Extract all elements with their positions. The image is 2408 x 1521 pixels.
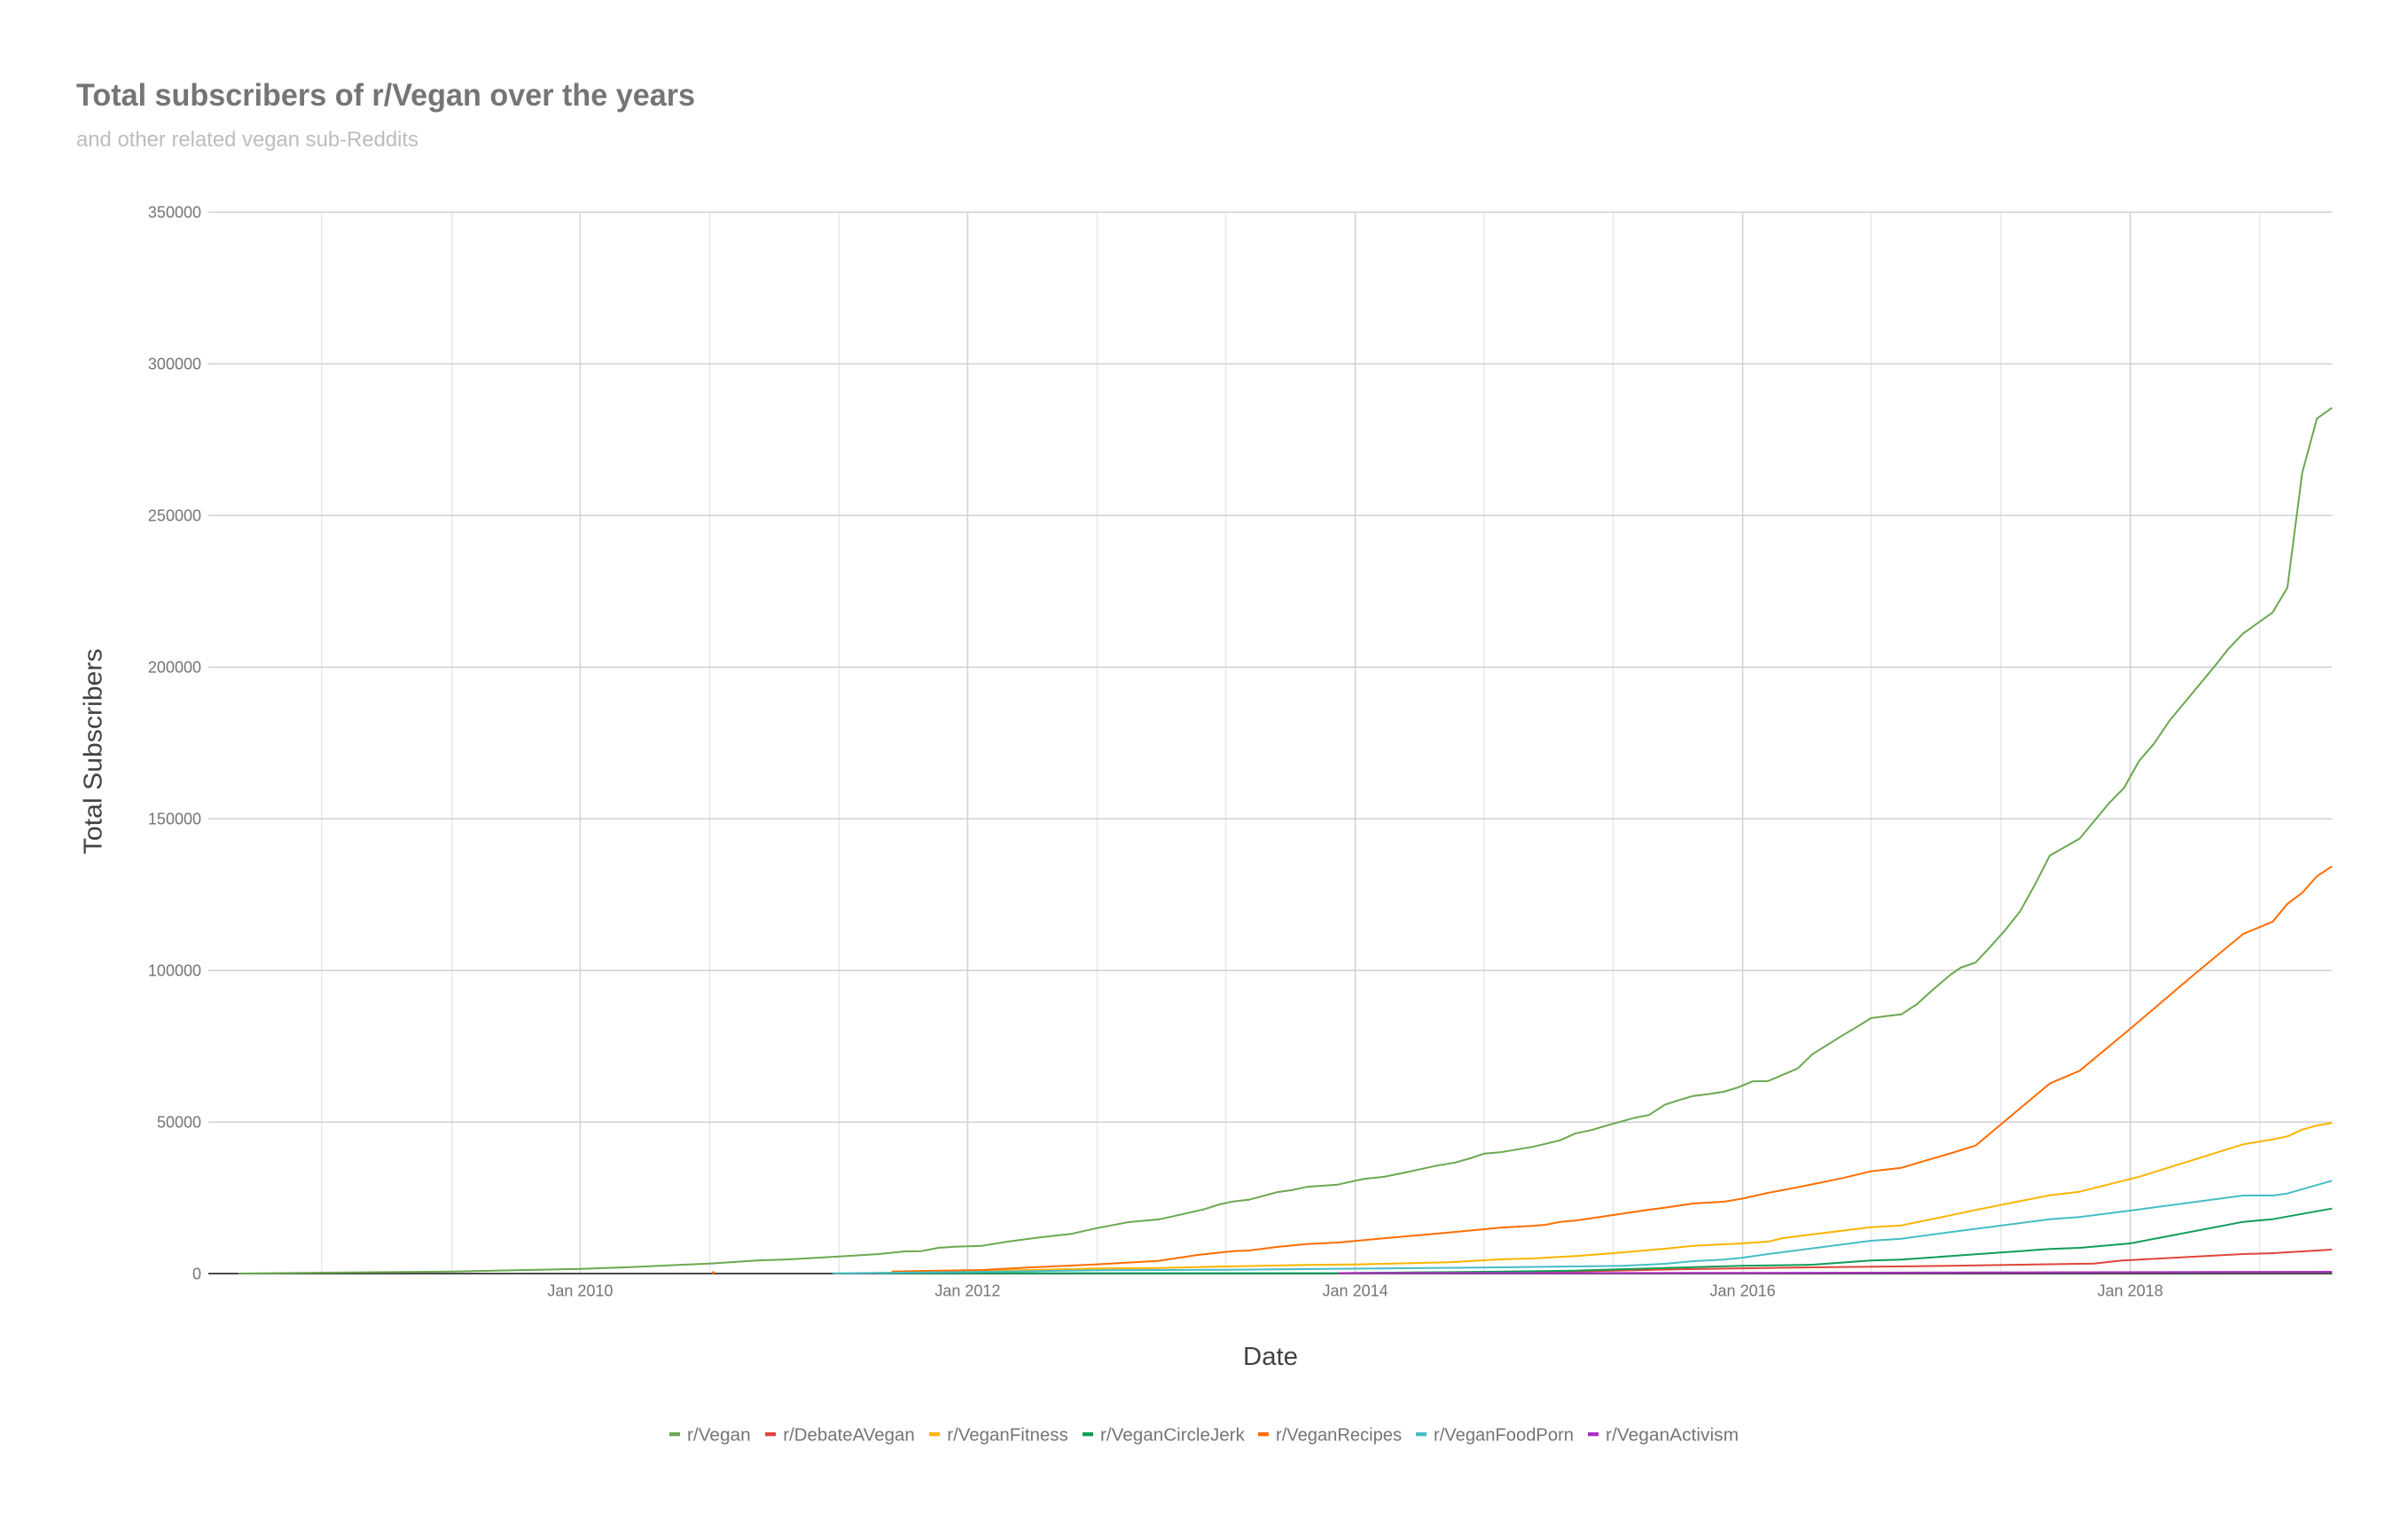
subtitle: and other related vegan sub-Reddits — [76, 128, 418, 152]
x-axis title: Date — [1243, 1343, 1298, 1371]
legend item: r/Vegan: r/Vegan — [687, 1425, 751, 1445]
y-axis tick labels: 250000 — [148, 507, 201, 525]
series: r/DebateAVegan — [1338, 1250, 2332, 1274]
legend item: r/VeganFitness: r/VeganFitness — [947, 1425, 1068, 1445]
y-axis tick labels: 300000 — [148, 355, 201, 372]
title: Total subscribers of r/Vegan over the years — [76, 78, 695, 113]
legend item: r/VeganRecipes: r/VeganRecipes — [1276, 1425, 1402, 1445]
legend item: r/VeganFoodPorn: r/VeganFoodPorn — [1434, 1425, 1574, 1445]
legend item: r/VeganCircleJerk: r/VeganCircleJerk — [1100, 1425, 1246, 1445]
y-axis tick labels — [148, 204, 201, 1282]
series: r/VeganRecipes — [712, 866, 2332, 1274]
y-axis title: Total Subscribers — [79, 648, 107, 854]
x-axis tick labels: Jan 2014 — [1323, 1282, 1388, 1300]
y-axis tick labels: 50000 — [157, 1114, 201, 1132]
series: r/VeganActivism — [1338, 1272, 2332, 1274]
x-axis tick labels: Jan 2016 — [1710, 1282, 1776, 1300]
legend — [669, 1425, 1739, 1445]
x-axis tick labels: Jan 2010 — [547, 1282, 613, 1300]
y-axis tick labels: 100000 — [148, 961, 201, 979]
legend item: r/VeganActivism: r/VeganActivism — [1606, 1425, 1739, 1445]
series: r/Vegan — [238, 408, 2332, 1274]
y-axis tick labels: 150000 — [148, 811, 201, 828]
y-axis tick labels: 350000 — [148, 204, 201, 222]
plot gridlines — [208, 212, 2332, 1274]
x-axis tick labels — [547, 1282, 2163, 1300]
x-axis tick labels: Jan 2012 — [934, 1282, 1000, 1300]
x-axis tick labels: Jan 2018 — [2098, 1282, 2163, 1300]
legend item: r/DebateAVegan: r/DebateAVegan — [783, 1425, 915, 1445]
series: r/VeganFoodPorn — [833, 1180, 2332, 1274]
y-axis tick labels: 200000 — [148, 658, 201, 676]
x-axis baseline — [208, 1273, 2332, 1274]
series: r/VeganCircleJerk — [877, 1209, 2332, 1274]
series: r/VeganFitness — [877, 1123, 2332, 1273]
y-axis tick labels: 0 — [192, 1265, 201, 1282]
